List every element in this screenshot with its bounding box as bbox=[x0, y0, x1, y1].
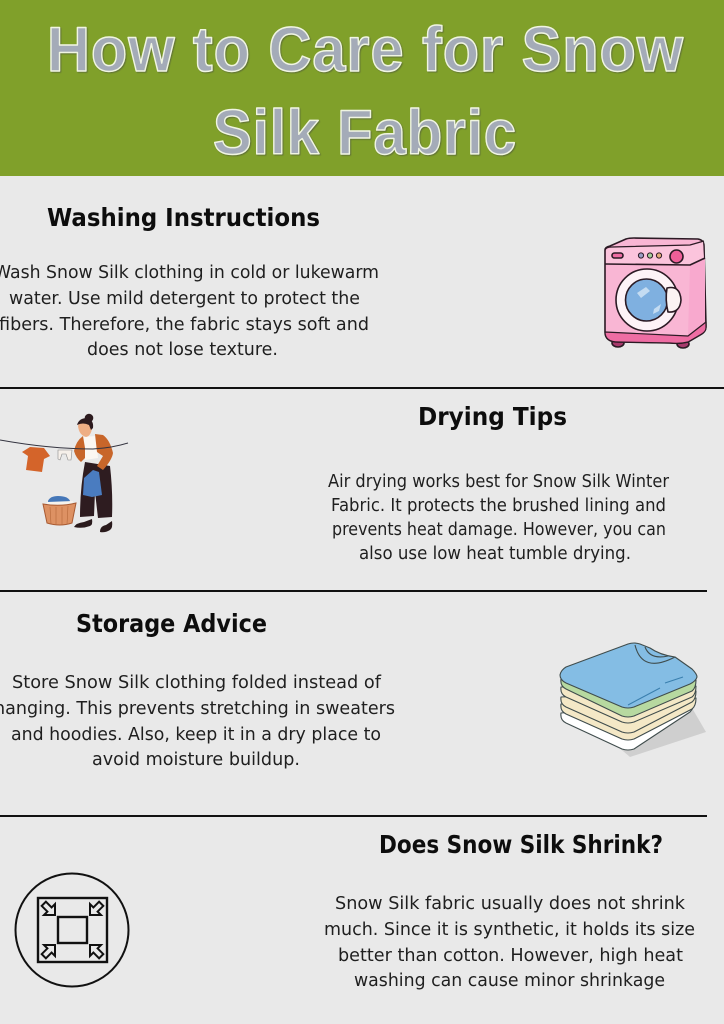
white shirt bbox=[83, 436, 98, 460]
divider bbox=[0, 387, 724, 389]
text block: storage: Store Snow Silk clothing folded instead of bbox=[12, 673, 382, 693]
title banner: Silk Fabric bbox=[213, 98, 517, 168]
text block: drying bbox=[328, 472, 670, 564]
text block: shrink: Snow Silk fabric usually does not shrink bbox=[335, 894, 686, 914]
icon: stack of folded shirts bbox=[560, 643, 706, 757]
panel: drying tips bbox=[0, 402, 670, 564]
text block: shrink: much. Since it is synthetic, it holds its size bbox=[324, 920, 695, 940]
orange shirt bbox=[22, 447, 50, 472]
heading: does snow silk shrink: Does Snow Silk Shrink? bbox=[379, 830, 663, 859]
text block: drying: Air drying works best for Snow Silk Winter bbox=[328, 472, 670, 492]
trousers bbox=[80, 462, 112, 518]
text block: drying: also use low heat tumble drying. bbox=[359, 544, 631, 564]
text block: shrink: better than cotton. However, high heat bbox=[338, 946, 683, 966]
text block: drying: Fabric. It protects the brushed lining and bbox=[331, 496, 666, 516]
icon: shrink symbol bbox=[16, 874, 128, 986]
small white garment bbox=[58, 450, 72, 460]
divider bbox=[0, 590, 707, 592]
panel: storage advice bbox=[0, 609, 706, 770]
jacket bbox=[74, 436, 85, 462]
text block: storage: and hoodies. Also, keep it in a dry place to bbox=[11, 725, 381, 745]
text block: washing: water. Use mild detergent to protect the bbox=[9, 289, 360, 309]
title banner bbox=[0, 0, 724, 176]
laundry basket bbox=[43, 496, 76, 525]
text block: washing bbox=[0, 263, 379, 360]
text block: storage: hanging. This prevents stretching in sweaters bbox=[0, 699, 395, 719]
text block: shrink: washing can cause minor shrinkage bbox=[354, 971, 665, 991]
shoes bbox=[74, 519, 92, 528]
icon: washing machine bbox=[605, 238, 706, 348]
text block: storage bbox=[0, 673, 395, 770]
heading: drying tips: Drying Tips bbox=[418, 402, 567, 431]
head bbox=[78, 421, 92, 437]
text block: washing: does not lose texture. bbox=[87, 340, 278, 360]
text block: washing: Wash Snow Silk clothing in cold or lukewarm bbox=[0, 263, 379, 283]
text block: storage: avoid moisture buildup. bbox=[92, 750, 300, 770]
panel: does snow silk shrink bbox=[16, 830, 695, 991]
title banner: How to Care for Snow bbox=[47, 15, 684, 85]
text block: washing: fibers. Therefore, the fabric stays soft and bbox=[0, 315, 369, 335]
clothesline bbox=[0, 440, 128, 449]
text block: shrink bbox=[324, 894, 695, 991]
heading: storage advice: Storage Advice bbox=[76, 609, 267, 638]
folded blue garment bbox=[83, 470, 102, 497]
icon: woman hanging laundry bbox=[0, 414, 128, 532]
divider bbox=[0, 815, 707, 817]
panel: washing instructions bbox=[0, 203, 706, 360]
heading: washing instructions: Washing Instructions bbox=[47, 203, 320, 232]
text block: drying: prevents heat damage. However, you can bbox=[332, 520, 666, 540]
